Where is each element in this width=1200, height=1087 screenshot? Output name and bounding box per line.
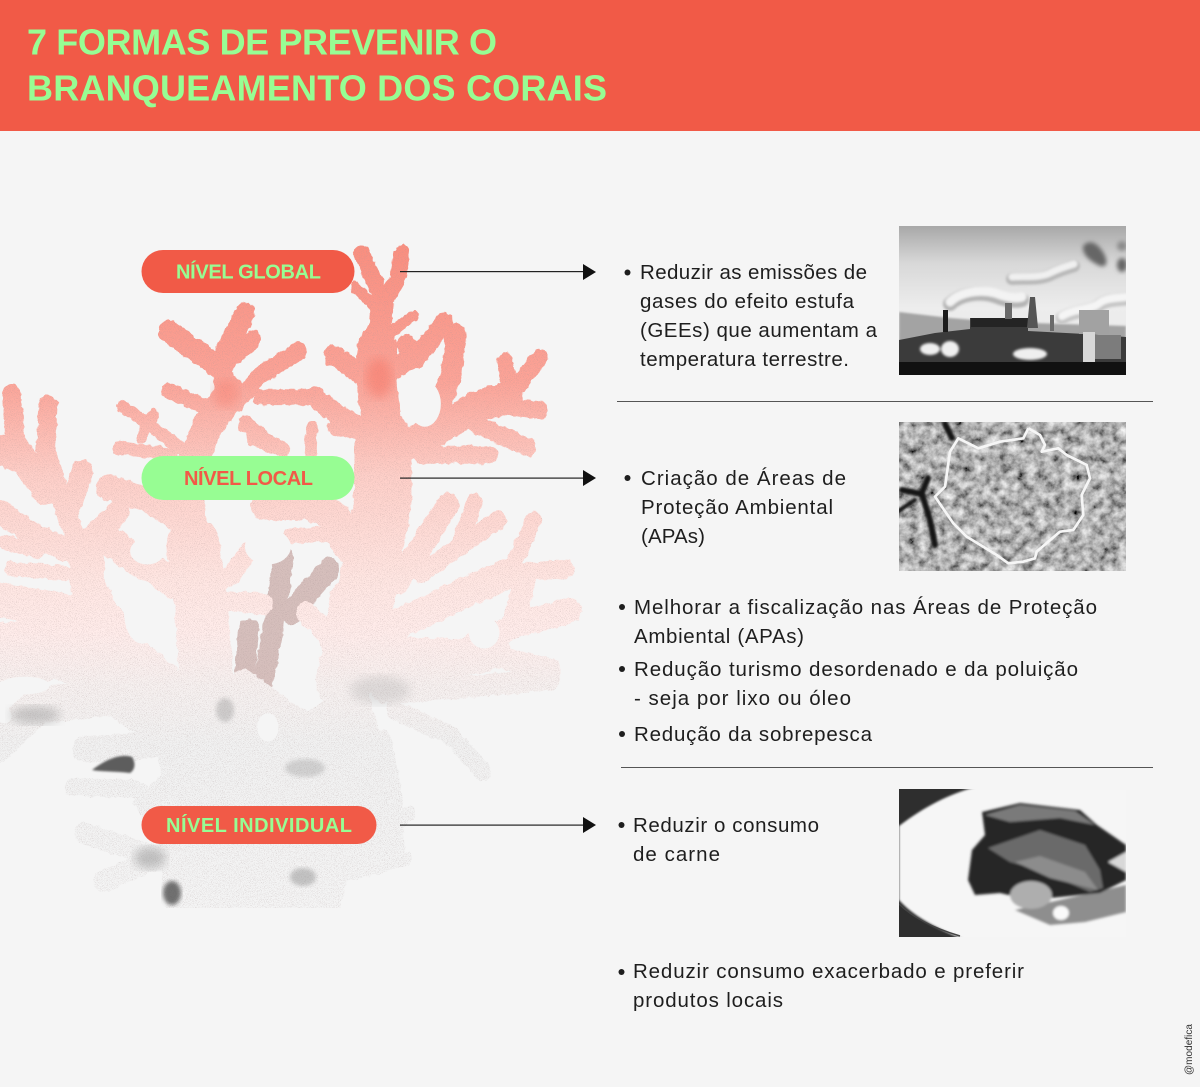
arrow: global <box>400 264 596 280</box>
header banner <box>0 0 1200 131</box>
divider <box>621 767 1153 768</box>
center-left tree <box>193 547 207 688</box>
text block: individual meat <box>618 814 819 866</box>
pill: nivel individual <box>142 806 376 844</box>
text block: local actions: Melhorar a fiscalização nas Áreas de Proteção <box>634 596 1097 619</box>
photo: satellite map <box>899 422 1126 571</box>
left tree <box>11 395 80 547</box>
pill: nivel global: NÍVEL GLOBAL <box>176 260 321 284</box>
text block: individual local products: produtos locais <box>633 989 783 1012</box>
text block: global: Reduzir as emissões de <box>640 261 867 284</box>
text block: local actions: Redução turismo desordenado e da poluição <box>634 658 1078 681</box>
text block: global: (GEEs) que aumentam a <box>640 319 878 342</box>
divider <box>617 401 1153 402</box>
text block: individual local products: Reduzir consumo exacerbado e preferir <box>633 960 1024 983</box>
text block: individual local products <box>618 960 1024 1012</box>
center branches <box>245 560 329 679</box>
title: BRANQUEAMENTO DOS CORAIS <box>27 68 607 108</box>
text block: local APA <box>624 467 846 548</box>
text block: global <box>624 261 878 371</box>
text block: local APA: Proteção Ambiental <box>641 496 833 519</box>
text block: individual meat: Reduzir o consumo <box>633 814 819 837</box>
text block: individual meat: de carne <box>633 843 720 866</box>
pill: nivel global <box>142 250 354 293</box>
text block: local actions: - seja por lixo ou óleo <box>634 687 851 710</box>
text block: global: gases do efeito estufa <box>640 290 855 313</box>
text block: global: temperatura terrestre. <box>640 348 849 371</box>
pill: nivel local: NÍVEL LOCAL <box>184 467 313 490</box>
trunk mass <box>134 670 406 917</box>
arrow: individual <box>400 817 596 833</box>
title: 7 FORMAS DE PREVENIR O <box>27 22 497 62</box>
text block: local APA: (APAs) <box>641 525 705 548</box>
text block: local actions <box>619 596 1097 746</box>
coral illustration <box>0 254 570 917</box>
protected area outline <box>935 428 1090 563</box>
photo: factory with smoke <box>899 226 1127 375</box>
text block: local actions: Redução da sobrepesca <box>634 723 873 746</box>
text block: local APA: Criação de Áreas de <box>641 467 846 490</box>
hole cut-outs <box>0 381 499 741</box>
pill: nivel local <box>142 456 354 500</box>
title <box>27 22 607 108</box>
photo: plate of meat <box>899 787 1130 940</box>
credit: @modefica <box>1184 1024 1195 1075</box>
coral shading <box>10 358 410 905</box>
arrow: local <box>400 470 596 486</box>
top right tree <box>362 254 402 305</box>
right lower branches <box>398 505 448 582</box>
text block: local actions: Ambiental (APAs) <box>634 625 804 648</box>
pill: nivel individual: NÍVEL INDIVIDUAL <box>166 814 352 837</box>
